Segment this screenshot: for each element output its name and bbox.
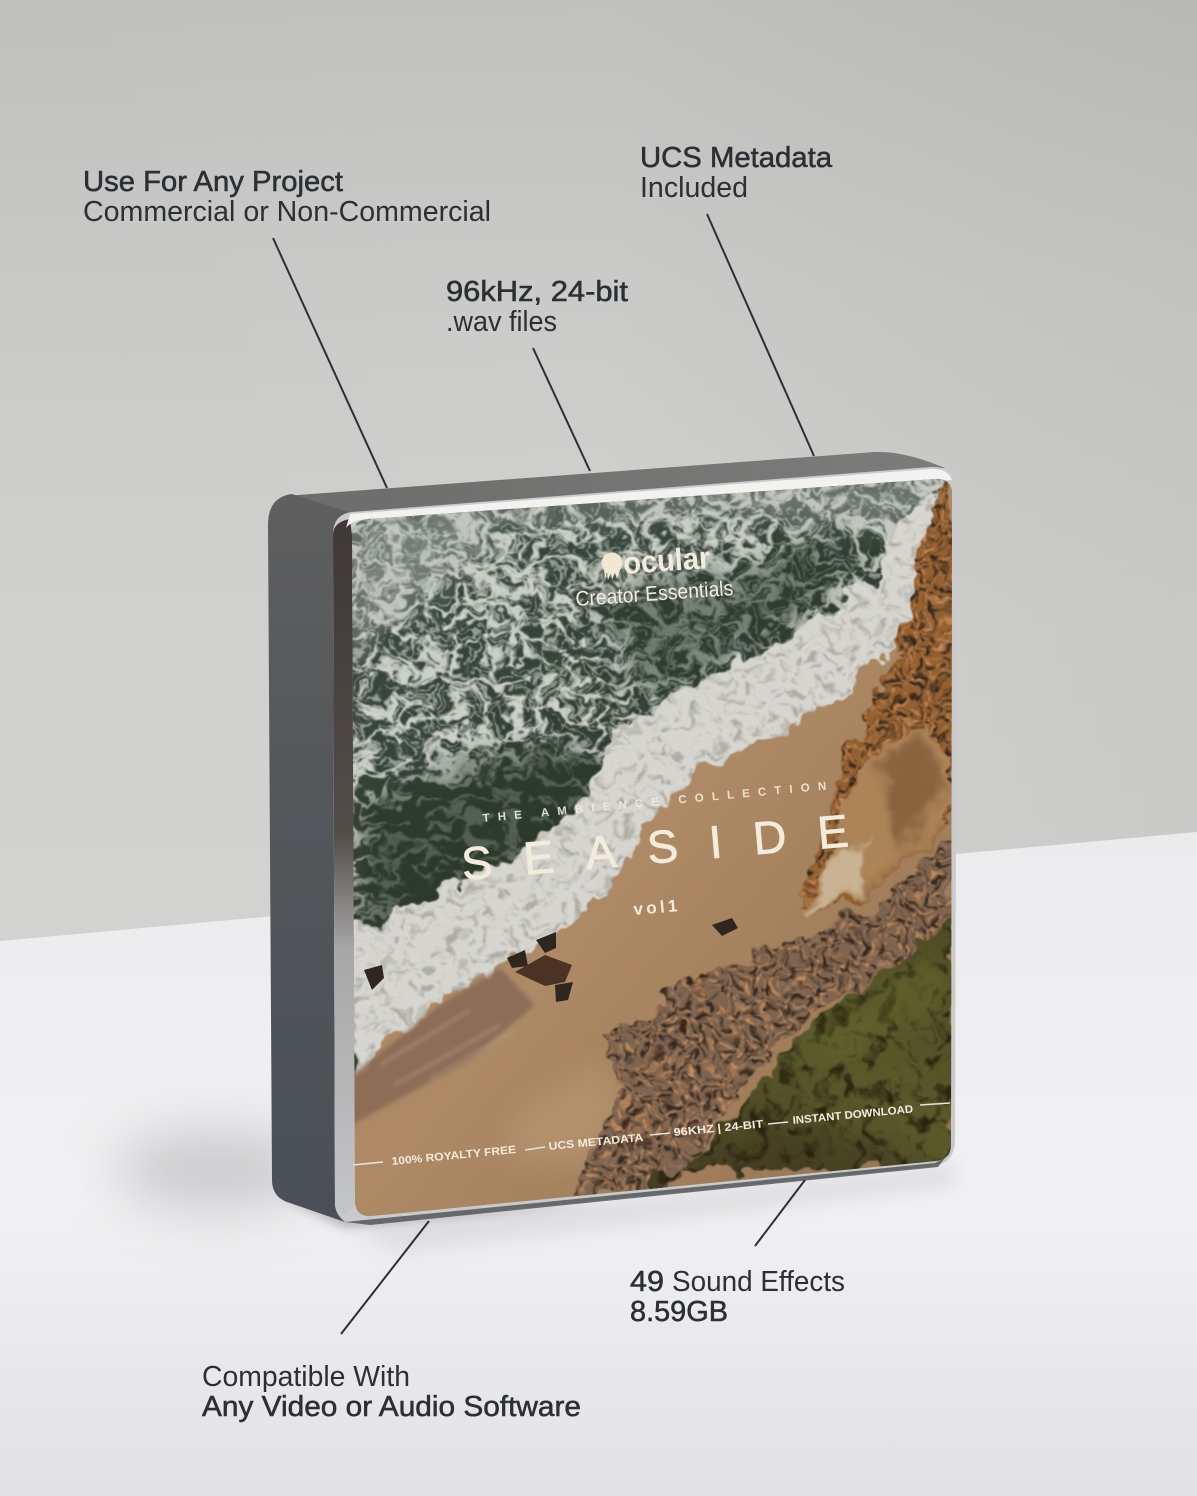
- callout: sound effects and size: [630, 1266, 845, 1328]
- title: SEASIDE: SEASIDE: [459, 804, 850, 890]
- callout: UCS metadata: [640, 142, 832, 204]
- green moss slope: [646, 916, 952, 1189]
- box top face: [285, 452, 945, 530]
- callout: compatibility: Any Video or Audio Software: [202, 1391, 581, 1423]
- leader line: compatibility: [341, 1221, 429, 1334]
- bottom feature strip: INSTANT DOWNLOAD: [792, 1103, 914, 1127]
- leader line: any project: [273, 238, 387, 488]
- background wall: [0, 0, 1197, 950]
- box silver frame: [333, 467, 957, 1225]
- pebble field: [572, 840, 952, 1196]
- callout: UCS metadata: Included: [640, 172, 748, 204]
- callout: file format: [446, 276, 628, 338]
- collection label: THE AMBIENCE COLLECTION: [482, 781, 827, 825]
- floor: [0, 832, 1197, 1496]
- volume label: vol1: [633, 896, 678, 919]
- breaking wave: [340, 480, 960, 1100]
- sand beach: [340, 470, 960, 1230]
- leader line: sound effects: [755, 1180, 805, 1246]
- logo: ocular: ocular: [622, 540, 711, 581]
- icon: octopus: [602, 552, 622, 580]
- sandy shore highlight: [519, 1076, 616, 1162]
- callout: UCS metadata: UCS Metadata: [640, 142, 832, 174]
- beach rocks: [364, 918, 738, 1002]
- box left side: [268, 494, 352, 1222]
- callout: sound effects and size: 49: [630, 1266, 664, 1298]
- callout: compatibility: Compatible With: [202, 1361, 410, 1393]
- wet sand at shoreline: [352, 968, 535, 1125]
- dark sea with foam texture: [340, 470, 960, 1100]
- callout: use for any project: Use For Any Project: [83, 166, 343, 198]
- callout: file format: 96kHz, 24-bit: [446, 276, 628, 308]
- subtitle: Creator Essentials: Creator Essentials: [575, 577, 734, 611]
- orange cliff: [798, 480, 952, 918]
- callout: compatibility: [202, 1361, 581, 1423]
- callout: use for any project: Commercial or Non-Commercial: [83, 196, 491, 228]
- bottom feature strip: UCS METADATA: [548, 1132, 644, 1153]
- floor shadow: [115, 1132, 955, 1250]
- callout: file format: .wav files: [446, 306, 557, 338]
- product box: [268, 452, 960, 1230]
- callout: sound effects and size: 8.59GB: [630, 1296, 728, 1328]
- callout: sound effects and size: Sound Effects: [672, 1266, 845, 1298]
- bottom feature strip: [353, 1103, 950, 1168]
- bottom feature strip: 96KHZ | 24-BIT: [673, 1118, 764, 1139]
- leader line: file format: [533, 348, 590, 471]
- leader line: metadata: [707, 214, 814, 456]
- bottom feature strip: 100% ROYALTY FREE: [391, 1144, 517, 1168]
- cover artwork: [340, 470, 960, 1230]
- callout: use for any project: [83, 166, 491, 228]
